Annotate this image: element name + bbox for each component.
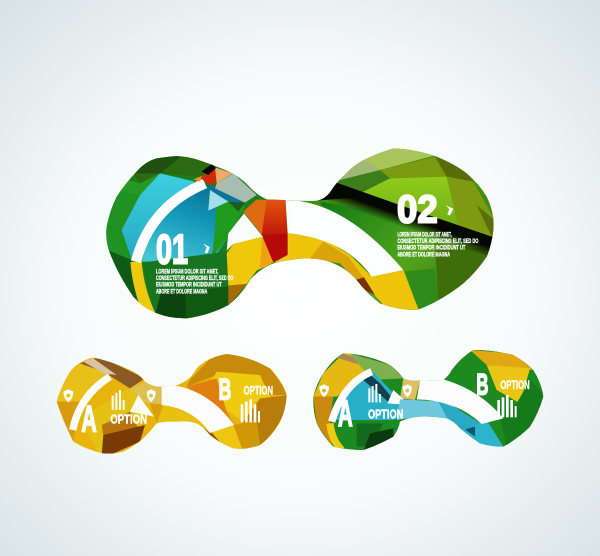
bar icon A	[112, 390, 125, 410]
panel: 01 left blob	[106, 156, 300, 318]
chevron arrow 02	[446, 205, 453, 215]
bar icon B multicolour	[497, 395, 517, 417]
letter B: B	[219, 373, 231, 406]
bar icon B	[241, 399, 260, 422]
panel: 02 right blob	[290, 148, 494, 310]
text block 02: LOREM IPSUM DOLOR SIT AMET,	[397, 231, 452, 238]
number 02: 02	[397, 189, 438, 232]
text block 02: ABORE ET DOLORE MAGNA	[397, 251, 450, 258]
label option B: OPTION	[244, 383, 273, 397]
chevron arrow 01	[203, 243, 210, 253]
number 01: 01	[156, 225, 188, 272]
letter A: A	[81, 398, 97, 440]
blob artwork multicolour	[310, 347, 547, 453]
icon: pin left	[63, 389, 73, 402]
text block 01: LOREM IPSUM DOLOR SIT AMET,	[156, 268, 218, 275]
text block 02: CONSECTETUR ADIPISCING ELIT, SED DO	[397, 238, 478, 245]
blob artwork yellow	[56, 354, 287, 454]
text block 01: ABORE ET DOLORE MAGNA	[156, 288, 208, 295]
text block 01: CONSECTETUR ADIPISCING ELIT, SED DO	[156, 275, 233, 282]
blob artwork 02	[290, 148, 494, 310]
label option B multicolour: OPTION	[500, 378, 530, 392]
panel: small yellow A/B blob	[56, 354, 287, 454]
text block 01	[156, 268, 233, 295]
bar icon A multicolour	[368, 384, 381, 402]
blob artwork 01	[106, 156, 300, 318]
icon: pin left multicolour	[319, 384, 329, 397]
text block 02: EIUSMOD TEMPOR INCIDIDUNT UT	[397, 245, 465, 252]
text block 02	[397, 231, 478, 258]
icon: pin right	[147, 389, 156, 402]
panel: small multicolour A/B blob	[310, 347, 547, 453]
letter B multicolour: B	[476, 368, 488, 401]
text block 01: EIUSMOD TEMPOR INCIDIDUNT UT	[156, 282, 222, 289]
letter A multicolour: A	[338, 393, 353, 434]
label option A: OPTION	[110, 411, 147, 426]
icon: pin right multicolour	[403, 384, 412, 397]
label option A multicolour: OPTION	[368, 407, 403, 421]
